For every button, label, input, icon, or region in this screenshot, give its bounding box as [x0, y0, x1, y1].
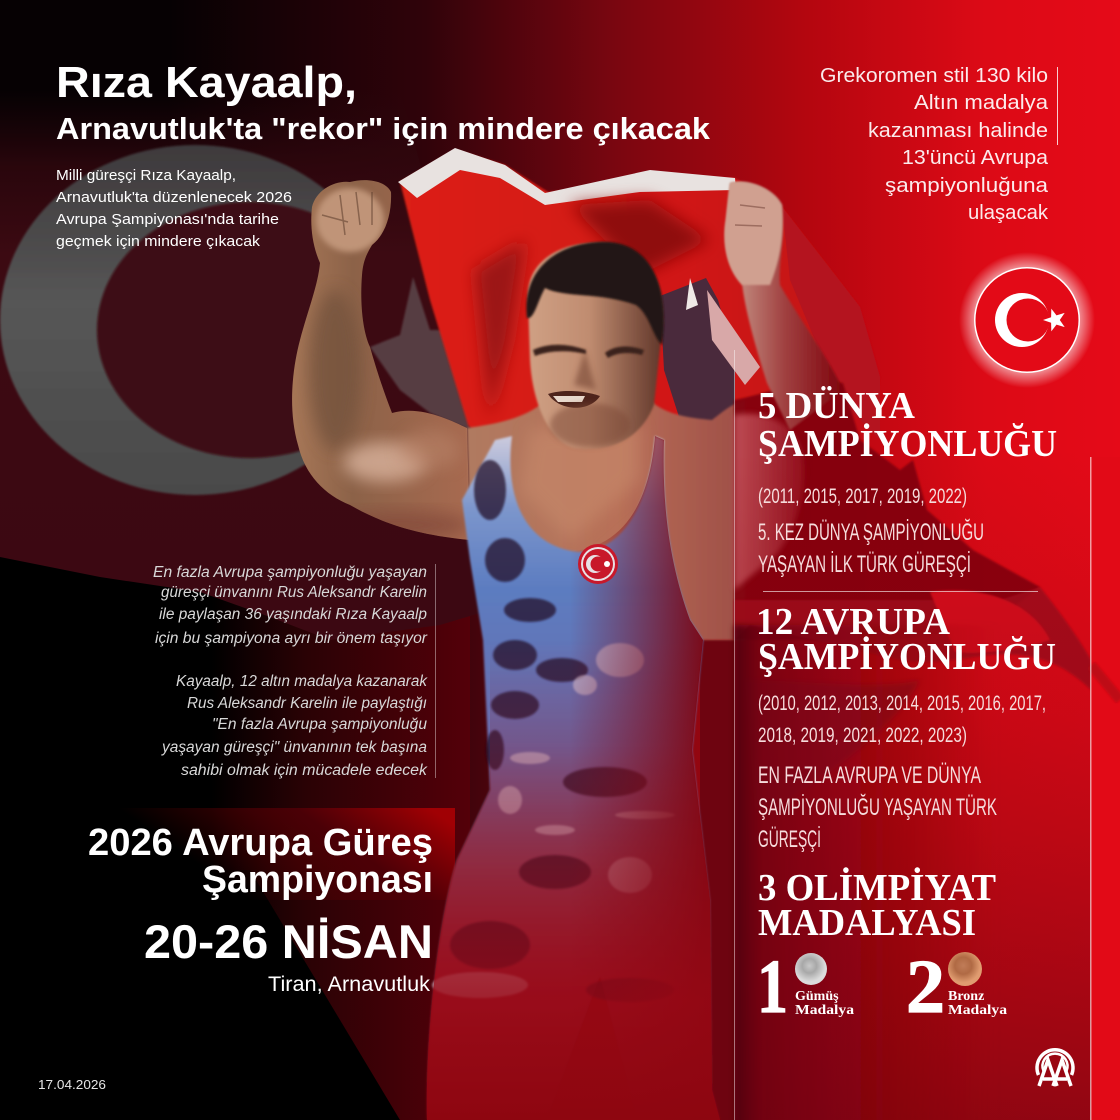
left body text: "En fazla Avrupa şampiyonluğu: [212, 716, 427, 733]
left arm and fist: [292, 180, 470, 540]
world championships: 5. KEZ DÜNYA ŞAMPİYONLUĞU: [758, 519, 984, 546]
european championships: 12 AVRUPA: [756, 601, 951, 643]
intro text: Arnavutluk'ta düzenlenecek 2026: [56, 189, 292, 206]
world championships: (2011, 2015, 2017, 2019, 2022): [758, 485, 967, 508]
red box behind event title: [16, 808, 455, 900]
flag star: [370, 277, 470, 430]
left body text: ile paylaşan 36 yaşındaki Rıza Kayaalp: [159, 606, 427, 623]
bronze medal: [906, 945, 1007, 1029]
left body text: Rus Aleksandr Karelin ile paylaştığı: [187, 695, 427, 712]
lower left black area: [0, 540, 470, 1120]
silver medal: Madalya: [795, 1003, 854, 1018]
olympic medals: [757, 867, 1007, 1029]
top right note: Altın madalya: [914, 92, 1049, 114]
title: Arnavutluk'ta "rekor" için mindere çıkacak: [56, 111, 711, 146]
left body text: Kayaalp, 12 altın madalya kazanarak: [176, 673, 428, 690]
top right note: [820, 65, 1058, 224]
top right note: 13'üncü Avrupa: [902, 147, 1049, 169]
european championships: EN FAZLA AVRUPA VE DÜNYA: [758, 762, 981, 789]
dark strip beside the legs: [700, 640, 734, 1120]
flag behind wrestler: [398, 148, 880, 440]
silver medal: [757, 945, 854, 1029]
top right note: Grekoromen stil 130 kilo: [820, 65, 1048, 87]
olympic medals: 3 OLİMPİYAT: [758, 867, 996, 909]
singlet: [427, 436, 720, 1120]
title: Rıza Kayaalp,: [56, 58, 357, 107]
world championships: YAŞAYAN İLK TÜRK GÜREŞÇİ: [758, 551, 971, 578]
silver medal: 1: [757, 945, 788, 1029]
head: [526, 242, 664, 449]
olympic medals: MADALYASI: [758, 902, 976, 944]
title: [56, 58, 711, 146]
european championships: 2018, 2019, 2021, 2022, 2023): [758, 724, 967, 747]
intro text: geçmek için mindere çıkacak: [56, 233, 261, 250]
flag crescent: [0, 144, 325, 496]
left body text: güreşçi ünvanını Rus Aleksandr Karelin: [161, 584, 427, 601]
silver medal: Gümüş: [795, 989, 839, 1004]
right arm and hand: [725, 182, 1040, 640]
left body text: için bu şampiyona ayrı bir önem taşıyor: [155, 630, 428, 647]
photo: wrestler with flag: [292, 148, 880, 1120]
world championships: [758, 385, 1057, 592]
european championships: ŞAMPİYONLUĞU: [758, 635, 1056, 678]
world championships: ŞAMPİYONLUĞU: [758, 422, 1057, 465]
top right note: kazanması halinde: [868, 120, 1048, 142]
background waving flag: [0, 90, 490, 640]
icon: AA logo: [1037, 1050, 1073, 1086]
event title: 20-26 NİSAN: [144, 915, 433, 968]
left body text: En fazla Avrupa şampiyonluğu yaşayan: [153, 564, 427, 581]
icon: Turkish flag circle: [959, 252, 1095, 388]
singlet badge: crescent and star: [578, 544, 618, 584]
torso and shoulders: [467, 400, 745, 640]
bronze medal: Bronz: [948, 989, 984, 1004]
bronze medal: 2: [906, 945, 945, 1029]
event title: 2026 Avrupa Güreş: [88, 822, 433, 864]
european championships: GÜREŞÇİ: [758, 826, 821, 853]
world championships: 5 DÜNYA: [758, 385, 916, 427]
date: 17.04.2026: [38, 1077, 106, 1092]
intro text: Avrupa Şampiyonası'nda tarihe: [56, 211, 279, 228]
event title: Şampiyonası: [202, 859, 433, 901]
singlet camouflage pattern: [450, 460, 674, 1002]
top right note: şampiyonluğuna: [885, 175, 1049, 197]
event title: [88, 822, 433, 996]
top right note: ulaşacak: [968, 202, 1049, 224]
intro text: [56, 167, 292, 250]
event title: Tiran, Arnavutluk: [268, 973, 431, 996]
left body text: yaşayan güreşçi" ünvanının tek başına: [161, 739, 427, 756]
left body text: [153, 564, 436, 779]
intro text: Milli güreşçi Rıza Kayaalp,: [56, 167, 236, 184]
bronze medal: Madalya: [948, 1003, 1007, 1018]
left body text: sahibi olmak için mücadele edecek: [181, 762, 428, 779]
right red panel: [734, 350, 1120, 1120]
european championships: [756, 601, 1056, 853]
